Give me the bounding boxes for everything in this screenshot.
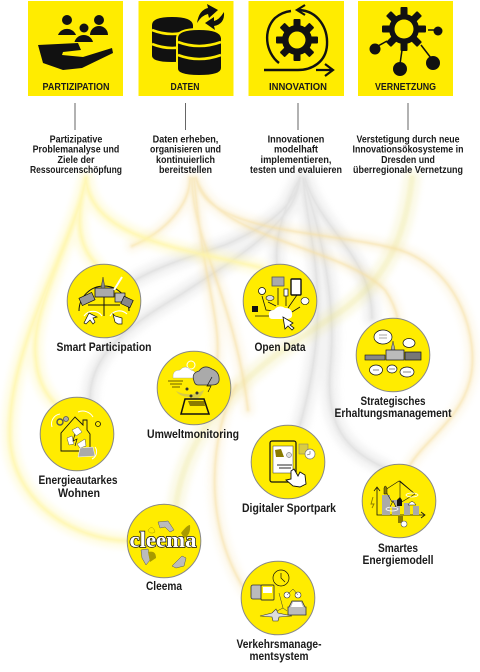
- text block: Vernetzung description: [352, 134, 464, 176]
- icon: vehicles and clock: [251, 570, 306, 621]
- project: Cleema: [127, 504, 201, 593]
- project: Digitaler Sportpark: [242, 425, 336, 515]
- text block: Vernetzung description: Innovationsökosysteme in: [352, 144, 464, 156]
- project: Smartes Energiemodell: [362, 464, 436, 567]
- project: Smart Participation: [56, 264, 152, 354]
- icon: tablet and hand: [270, 441, 315, 487]
- connector lines: [75, 103, 408, 130]
- icon: network gear: [370, 7, 442, 76]
- label: Cleema: [146, 579, 182, 593]
- project: Umweltmonitoring: [147, 351, 239, 441]
- text block: Innovation description: implementieren,: [260, 155, 332, 166]
- panel: Vernetzung: [358, 1, 453, 96]
- panel: Daten: [138, 1, 234, 96]
- label: [334, 394, 452, 420]
- ribbons: gray innovation connections: [90, 178, 385, 468]
- label: [38, 473, 118, 500]
- label: Energiemodell: [362, 553, 434, 567]
- label: DATEN: [170, 82, 200, 93]
- icon: devices and cloud: [252, 277, 309, 330]
- label: VERNETZUNG: [375, 82, 436, 93]
- label: Open Data: [254, 340, 306, 354]
- icon: city over globe: [79, 277, 133, 324]
- project: Energieautarkes Wohnen: [38, 397, 118, 500]
- ribbons: yellow partizipation connections: [10, 178, 262, 541]
- icon: people in hand: [38, 15, 113, 70]
- text block: Innovation description: Innovationen: [268, 134, 324, 146]
- text block: Partizipation description: Problemanalyse und: [33, 144, 119, 156]
- label: [236, 637, 322, 663]
- text block: Innovation description: [250, 134, 342, 176]
- text block: Partizipation description: Partizipative: [50, 134, 103, 146]
- text block: Vernetzung description: Verstetigung durch neue: [356, 134, 460, 146]
- logo text: cleema: cleema: [130, 527, 196, 552]
- label: Umweltmonitoring: [147, 427, 239, 441]
- label: Digitaler Sportpark: [242, 501, 336, 515]
- icon: buildings and speech bubbles: [365, 330, 421, 377]
- icon: gear cycle: [264, 5, 333, 76]
- text block: Innovation description: modelhaft: [274, 144, 318, 156]
- label: mentsystem: [250, 649, 308, 663]
- text block: Partizipation description: [30, 134, 122, 176]
- label: Smartes: [378, 541, 418, 555]
- project: Strategisches Erhaltungsmanagement: [334, 318, 452, 420]
- text block: Vernetzung description: überregionale Vernetzung: [353, 165, 463, 176]
- icon: house with solar: [52, 411, 100, 459]
- ribbons: orange daten connections: [132, 178, 472, 590]
- icon: recycling leaves: [141, 521, 190, 568]
- label: [362, 541, 434, 567]
- icon: databases with arrows: [152, 4, 224, 76]
- panel: Partizipation: [28, 1, 123, 96]
- icon: weather and sensor: [168, 361, 219, 414]
- text block: Daten description: organisieren und: [150, 144, 221, 156]
- label: Energieautarkes: [38, 473, 118, 487]
- icon: energy chart: [371, 481, 425, 527]
- text block: Daten description: kontinuierlich: [156, 155, 215, 166]
- text block: Daten description: [150, 134, 221, 176]
- label: Verkehrsmanage-: [236, 637, 322, 651]
- label: Smart Participation: [56, 340, 152, 354]
- text block: Daten description: bereitstellen: [159, 165, 212, 176]
- label: INNOVATION: [269, 82, 327, 93]
- project: Verkehrsmanagementsystem: [236, 561, 322, 663]
- project: Open Data: [243, 264, 317, 354]
- text block: Innovation description: testen und evaluieren: [250, 165, 342, 176]
- text block: Daten description: Daten erheben,: [153, 134, 218, 146]
- text block: Partizipation description: Ziele der: [58, 155, 94, 166]
- label: PARTIZIPATION: [42, 82, 110, 93]
- label: Wohnen: [58, 486, 100, 500]
- label: Strategisches: [360, 394, 426, 408]
- label: Erhaltungsmanagement: [334, 406, 452, 420]
- text block: Partizipation description: Ressourcenschöpfung: [30, 165, 122, 176]
- ribbons: olive vernetzung connections: [176, 178, 412, 505]
- panel: Innovation: [248, 1, 344, 96]
- text block: Vernetzung description: Dresden und: [381, 155, 435, 166]
